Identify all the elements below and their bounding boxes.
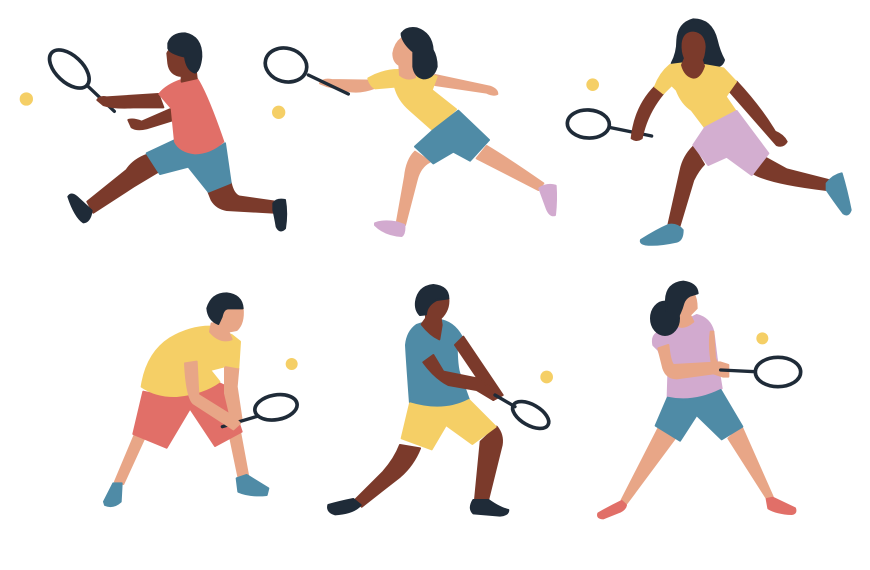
arms	[632, 82, 787, 146]
player 5: man in blue shirt and yellow shorts	[328, 285, 553, 516]
hair	[651, 282, 698, 335]
racket	[495, 395, 553, 434]
shirt	[368, 70, 456, 131]
arms	[658, 332, 728, 378]
legs	[622, 427, 773, 503]
shorts	[693, 111, 768, 175]
player 4: man in yellow shirt and red shorts	[104, 293, 299, 506]
player 1: man in red shirt lunging	[20, 33, 286, 230]
shirt	[142, 327, 240, 396]
head	[167, 33, 201, 82]
back arm	[225, 365, 242, 422]
face	[682, 33, 705, 78]
front arm	[185, 362, 240, 429]
shoes	[375, 185, 556, 236]
ball	[756, 332, 768, 344]
shoes	[68, 195, 286, 230]
hair	[672, 19, 724, 67]
ball	[540, 371, 553, 383]
shoes	[104, 475, 268, 506]
racket	[721, 357, 801, 387]
shorts	[656, 390, 742, 441]
shoes	[641, 173, 851, 245]
racket	[261, 43, 348, 94]
head	[416, 285, 448, 339]
face	[677, 293, 697, 327]
shorts	[133, 383, 242, 448]
racket	[567, 109, 652, 139]
shirt	[655, 63, 736, 128]
ball	[272, 106, 285, 119]
shorts	[415, 111, 489, 163]
legs	[115, 432, 248, 484]
shoes	[598, 498, 795, 518]
legs	[87, 155, 275, 213]
racket	[43, 43, 114, 111]
ball	[586, 78, 599, 91]
racket	[222, 391, 299, 427]
ball	[20, 92, 33, 106]
shorts	[147, 140, 231, 192]
ball	[286, 358, 298, 370]
legs	[668, 147, 828, 227]
shirt	[406, 320, 469, 407]
arms	[423, 337, 503, 400]
shirt	[159, 78, 223, 153]
arms	[97, 94, 173, 129]
legs	[355, 427, 502, 507]
shorts	[402, 400, 496, 449]
shoes	[328, 499, 508, 516]
player 6: woman in lilac shirt and blue shorts	[598, 282, 801, 518]
arms	[320, 75, 497, 95]
legs	[397, 146, 543, 225]
head	[393, 28, 437, 79]
player 3: woman in yellow shirt and lilac shorts	[567, 19, 851, 245]
player 2: woman in yellow shirt reaching	[261, 28, 556, 236]
head	[207, 293, 243, 340]
shirt	[653, 315, 722, 398]
